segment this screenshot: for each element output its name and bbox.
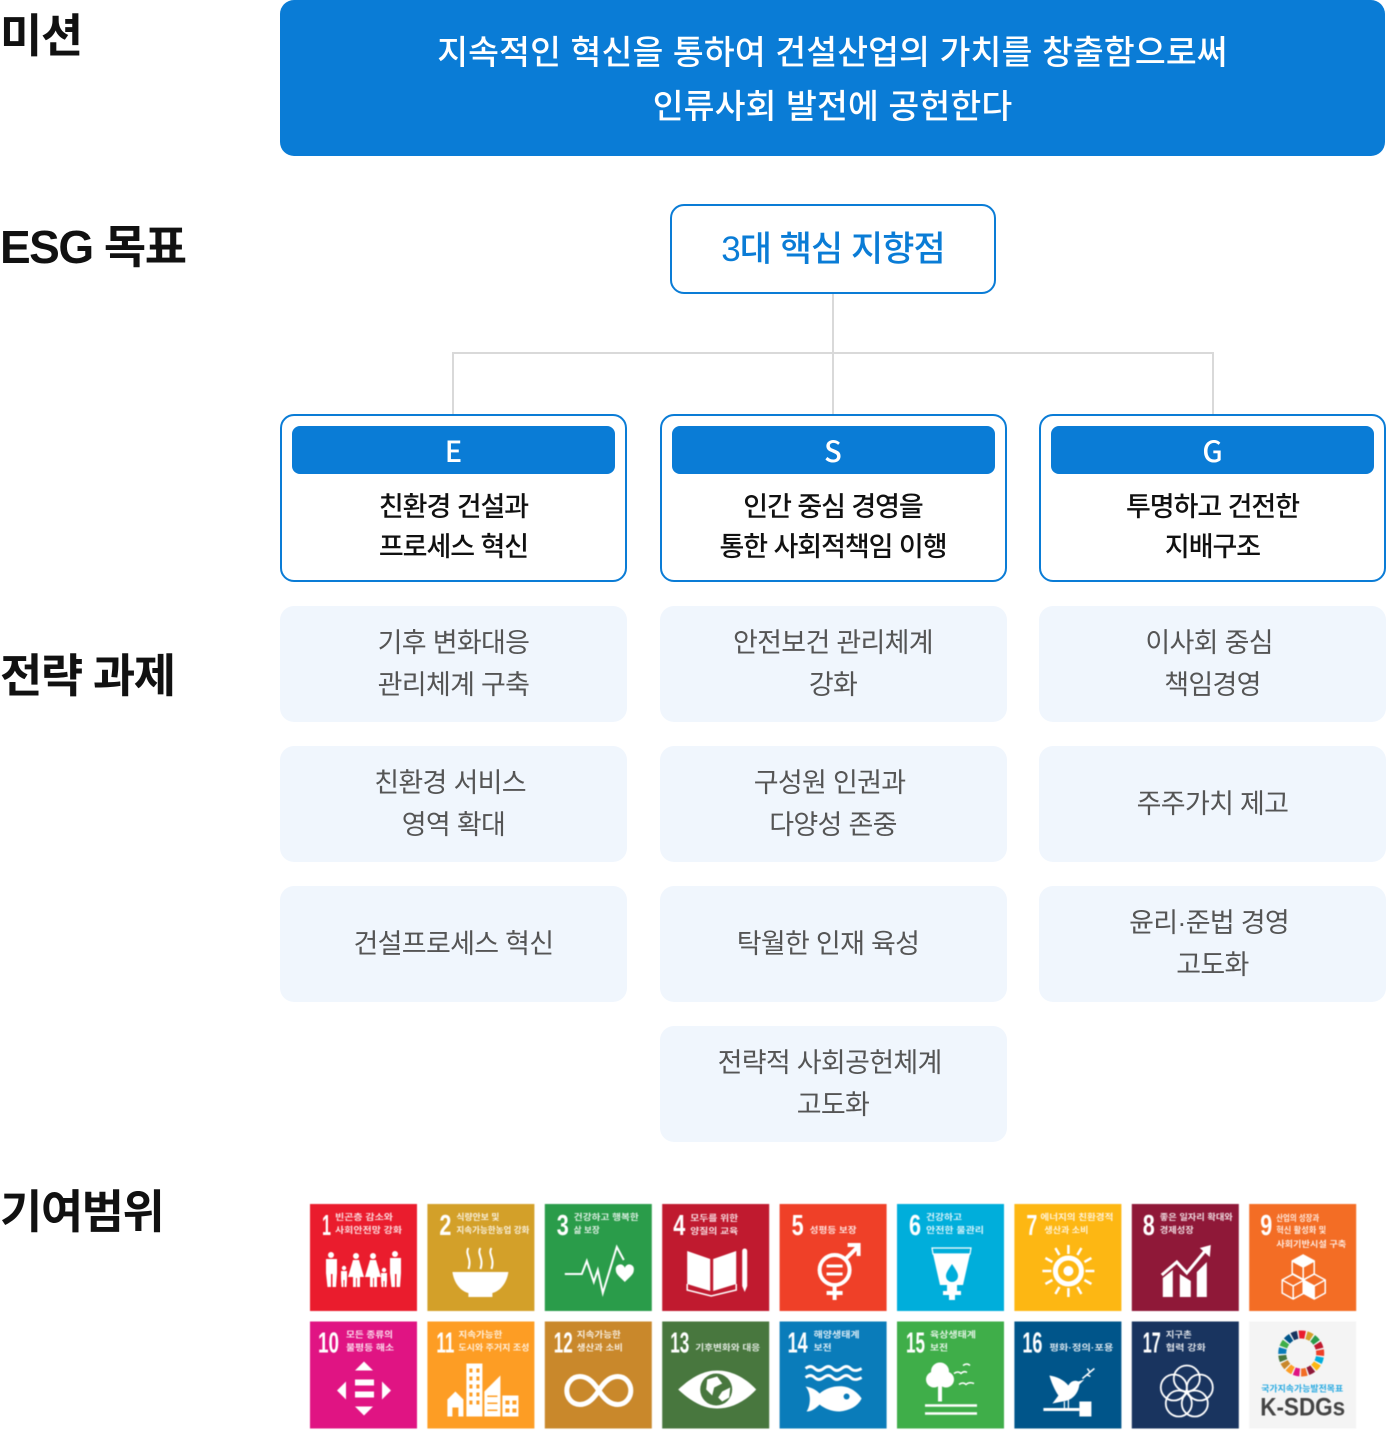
heading: 미션: 미션: [0, 10, 82, 62]
panel: E: [280, 414, 627, 582]
SDG 5: 성평등 보장: [810, 1225, 857, 1235]
SDG 2: [427, 1204, 534, 1311]
SDG 8: [1132, 1204, 1239, 1311]
SDG 16: 평화·정의·포용: [1049, 1342, 1114, 1352]
SDG 14: 보전: [814, 1342, 832, 1352]
SDG 3: 3: [557, 1210, 569, 1242]
SDG 1: 빈곤층 감소와: [335, 1212, 393, 1222]
task: S3: 탁월한 인재 육성: [737, 929, 919, 959]
SDG icon grid: [309, 1203, 1357, 1430]
SDG 3: [545, 1204, 652, 1311]
task: G3: 윤리·준법 경영: [1129, 908, 1289, 938]
SDG 9: 9: [1260, 1210, 1272, 1242]
G description: 투명하고 건전한: [1126, 492, 1299, 522]
panel: G: [1039, 414, 1386, 582]
SDG 8: 좋은 일자리 확대와: [1160, 1212, 1233, 1222]
task: E1: [280, 606, 627, 722]
mission banner: 지속적인 혁신을 통하여 건설산업의 가치를 창출함으로써: [437, 35, 1228, 72]
S header: [672, 426, 994, 474]
G header: G: [1202, 429, 1223, 471]
heading: 전략 과제: 전략 과제: [0, 650, 175, 702]
SDG 10: 10: [318, 1328, 339, 1360]
task: G3: 고도화: [1176, 950, 1249, 980]
task: S2: 구성원 인권과: [754, 768, 905, 798]
task: G1: 책임경영: [1164, 670, 1261, 700]
SDG 10: [310, 1322, 417, 1428]
SDG 6: 건강하고: [926, 1212, 962, 1222]
SDG 7: 에너지의 친환경적: [1040, 1212, 1113, 1222]
S description: 통한 사회적책임 이행: [719, 532, 946, 562]
SDG 12: 지속가능한: [577, 1330, 621, 1340]
SDG 7: 7: [1026, 1210, 1037, 1242]
task: E3: 건설프로세스 혁신: [354, 929, 553, 959]
E header: E: [445, 429, 462, 471]
SDG 14: [780, 1322, 887, 1428]
task: S2: 다양성 존중: [769, 810, 897, 840]
SDG 16: [1014, 1322, 1121, 1428]
SDG 13: 기후변화와 대응: [695, 1342, 760, 1352]
SDG 4: 양질의 교육: [690, 1226, 738, 1236]
SDG 13: 13: [670, 1328, 689, 1360]
SDG 2: 식량안보 및: [456, 1212, 500, 1222]
mission banner: 인류사회 발전에 공헌한다: [653, 89, 1012, 126]
E description: 친환경 건설과: [379, 492, 528, 522]
SDG 17: 협력 강화: [1166, 1342, 1206, 1352]
SDG 3: 삶 보장: [574, 1225, 600, 1235]
SDG 1: 1: [322, 1210, 331, 1242]
SDG 4: [662, 1204, 769, 1311]
SDG 9: [1249, 1204, 1356, 1311]
SDG 9: 혁신 활성화 및: [1276, 1225, 1326, 1235]
task: G2: [1039, 746, 1386, 862]
heading: ESG 목표: ESG 목표: [0, 221, 186, 273]
SDG 2: 지속가능한농업 강화: [456, 1225, 530, 1235]
SDG 14: 해양생태계: [814, 1330, 860, 1340]
task: E2: 영역 확대: [402, 810, 505, 840]
task: S1: 안전보건 관리체계: [733, 628, 933, 658]
E header: [292, 426, 615, 474]
SDG 4: 모두를 위한: [690, 1213, 738, 1223]
K-SDGs logo: 국가지속가능발전목표: [1261, 1384, 1343, 1394]
S description: [719, 492, 946, 562]
SDG 7: [1014, 1204, 1121, 1311]
SDG 11: [427, 1322, 534, 1428]
S header: S: [824, 429, 842, 471]
SDG 9: 사회기반시설 구축: [1276, 1239, 1346, 1249]
SDG 6: 6: [909, 1210, 921, 1242]
SDG 8: 8: [1143, 1210, 1155, 1242]
SDG 2: 2: [439, 1210, 451, 1242]
task: E1: 관리체계 구축: [378, 670, 529, 700]
SDG 11: 지속가능한: [458, 1330, 503, 1340]
SDG 4: 4: [673, 1210, 685, 1242]
task: E1: 기후 변화대응: [378, 628, 529, 658]
task: S2: [660, 746, 1006, 862]
core orientation box: [670, 204, 996, 294]
SDG 1: [310, 1204, 417, 1311]
E description: [379, 492, 528, 562]
core orientation box: 3대 핵심 지향점: [721, 230, 945, 269]
SDG 12: [545, 1322, 652, 1428]
SDG 10: 모든 종류의: [346, 1330, 393, 1340]
G description: 지배구조: [1165, 532, 1260, 562]
task: S4: [660, 1026, 1006, 1142]
connector lines: [452, 294, 1214, 414]
task: S1: 강화: [809, 670, 857, 700]
G header: [1051, 426, 1374, 474]
SDG 15: 육상생태계: [930, 1330, 976, 1340]
K-SDGs logo: K-SDGs: [1260, 1394, 1345, 1422]
SDG 17: 지구촌: [1166, 1330, 1192, 1340]
SDG 6: 안전한 물관리: [926, 1225, 984, 1235]
SDG 17: 17: [1143, 1328, 1161, 1360]
SDG 1: 사회안전망 강화: [335, 1225, 402, 1235]
SDG 13: [662, 1322, 769, 1428]
G description: [1126, 492, 1300, 562]
task: G3: [1039, 886, 1386, 1002]
SDG 15: 보전: [930, 1342, 948, 1352]
heading: 기여범위: 기여범위: [0, 1186, 163, 1238]
SDG 3: 건강하고 행복한: [574, 1212, 639, 1222]
colour wheel: [1281, 1333, 1322, 1374]
task: G1: 이사회 중심: [1145, 628, 1273, 658]
task: G2: 주주가치 제고: [1137, 789, 1288, 819]
mission banner: [280, 0, 1385, 156]
task: S3: [660, 886, 1006, 1002]
K-SDGs logo: [1249, 1322, 1356, 1428]
SDG 6: [897, 1204, 1004, 1311]
SDG 8: 경제성장: [1160, 1225, 1194, 1235]
E description: 프로세스 혁신: [379, 532, 528, 562]
SDG 7: 생산과 소비: [1044, 1225, 1088, 1235]
task: E2: [280, 746, 627, 862]
SDG 12: 생산과 소비: [577, 1342, 623, 1352]
SDG 16: 16: [1022, 1328, 1042, 1360]
SDG 15: 15: [906, 1328, 925, 1360]
task: S4: 고도화: [797, 1090, 869, 1120]
SDG 9: 산업의 성장과: [1276, 1213, 1319, 1223]
SDG 12: 12: [554, 1328, 573, 1360]
task: E2: 친환경 서비스: [374, 768, 526, 798]
SDG 5: 5: [792, 1210, 804, 1242]
S description: 인간 중심 경영을: [743, 492, 923, 522]
task: E3: [280, 886, 627, 1002]
task: G1: [1039, 606, 1386, 722]
SDG 10: 불평등 해소: [346, 1342, 394, 1352]
SDG 14: 14: [788, 1328, 808, 1360]
task: S1: [660, 606, 1006, 722]
SDG 17: [1132, 1322, 1239, 1428]
SDG 5: [780, 1204, 887, 1311]
panel: S: [660, 414, 1006, 582]
SDG 11: 11: [436, 1328, 454, 1360]
SDG 15: [897, 1322, 1004, 1428]
task: S4: 전략적 사회공헌체계: [718, 1048, 942, 1078]
SDG 11: 도시와 주거지 조성: [458, 1342, 529, 1352]
